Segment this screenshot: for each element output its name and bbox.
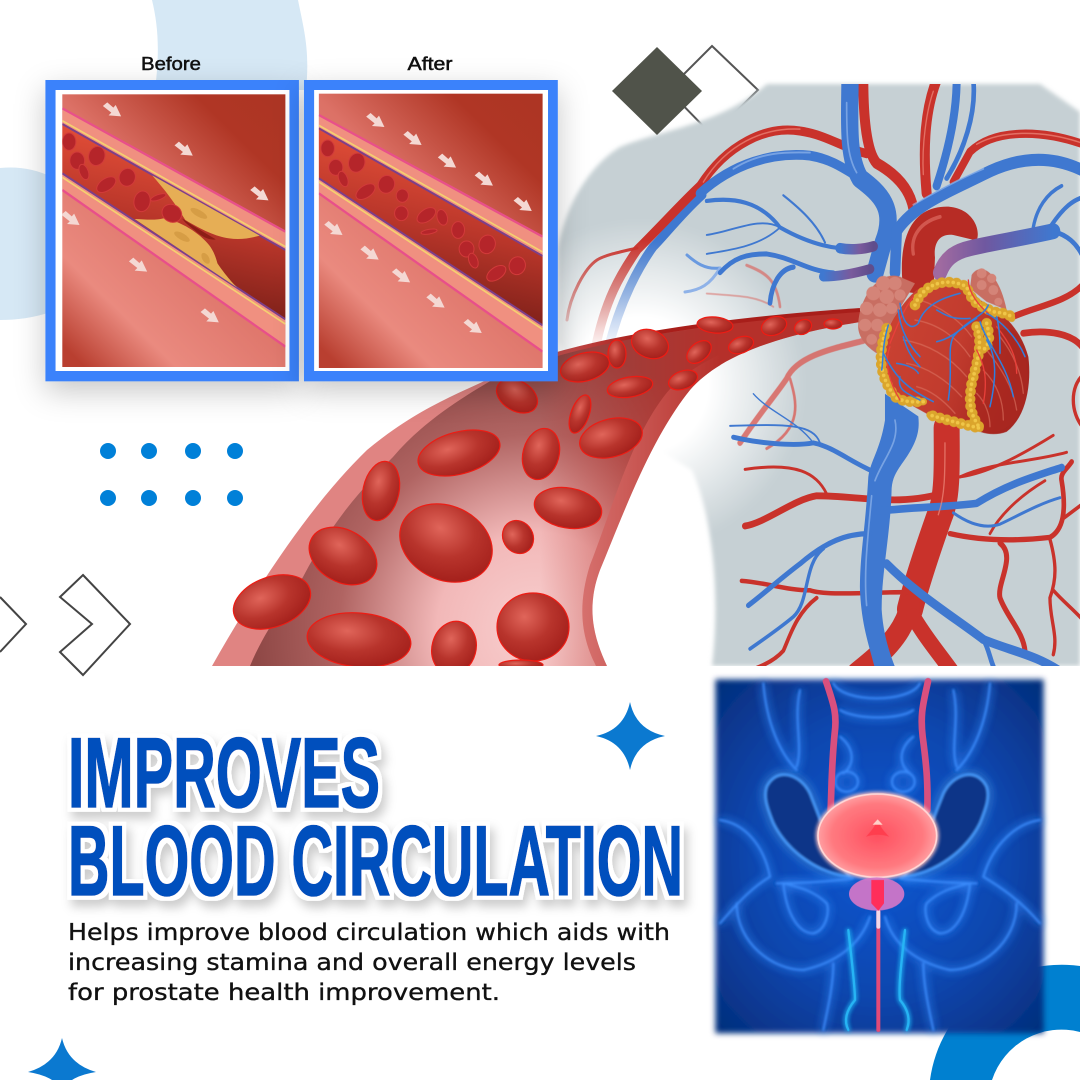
body silhouette with circulatory system: [558, 80, 1080, 675]
left atrium: [858, 276, 915, 353]
body text: Helps improve blood circulation which aids with: [68, 918, 670, 946]
aorta arch: [902, 207, 978, 295]
before/after comparison panels: [45, 54, 558, 381]
heart: [858, 268, 1029, 434]
fat deposits: [881, 282, 1012, 428]
decorative bottom-right blue ring: [930, 965, 1080, 1080]
red blood cells: [226, 313, 842, 680]
blood vessel network: [700, 80, 1080, 675]
dot grid: [100, 443, 243, 506]
body text: [68, 918, 670, 1006]
title: [68, 717, 683, 916]
sparkle star: [596, 702, 665, 770]
muscle striations: [903, 300, 1023, 427]
title: IMPROVES: [68, 717, 380, 828]
right atrium: [970, 268, 1007, 310]
coronary arteries: [887, 280, 1017, 403]
plaque upper: [152, 175, 260, 239]
right ventricle shadow: [968, 327, 1027, 432]
large blood vessel with red blood cells: [212, 310, 860, 680]
sparkle star bottom: [28, 1038, 96, 1080]
heart muscle: [878, 283, 1029, 434]
vessel highlights: [733, 103, 983, 605]
prostate gland: [849, 877, 904, 911]
faded arteries: [707, 265, 863, 449]
bladder: [818, 794, 937, 877]
after panel: [304, 80, 558, 381]
plaque lower: [135, 218, 238, 288]
prostate illustration: [715, 679, 1044, 1033]
after label: After: [408, 54, 453, 74]
chevron arrows: [0, 575, 130, 675]
body text: increasing stamina and overall energy levels: [68, 948, 636, 976]
before panel: [45, 80, 299, 381]
red arteries: [700, 80, 1080, 673]
urethra and ureters: [826, 681, 928, 1030]
body text: for prostate health improvement.: [68, 978, 500, 1006]
blue veins: [700, 80, 1080, 675]
outlined diamond: [668, 46, 758, 135]
purple pulmonary vessels: [840, 246, 873, 249]
faded upper-left artery and vein: [567, 186, 720, 350]
before label: Before: [141, 54, 201, 74]
dark diamond: [612, 47, 702, 135]
coronary veins: [882, 293, 1025, 407]
background light blue ring: [0, 0, 307, 320]
pelvic openings: [765, 775, 988, 877]
skeletal outlines: [720, 683, 1040, 1030]
